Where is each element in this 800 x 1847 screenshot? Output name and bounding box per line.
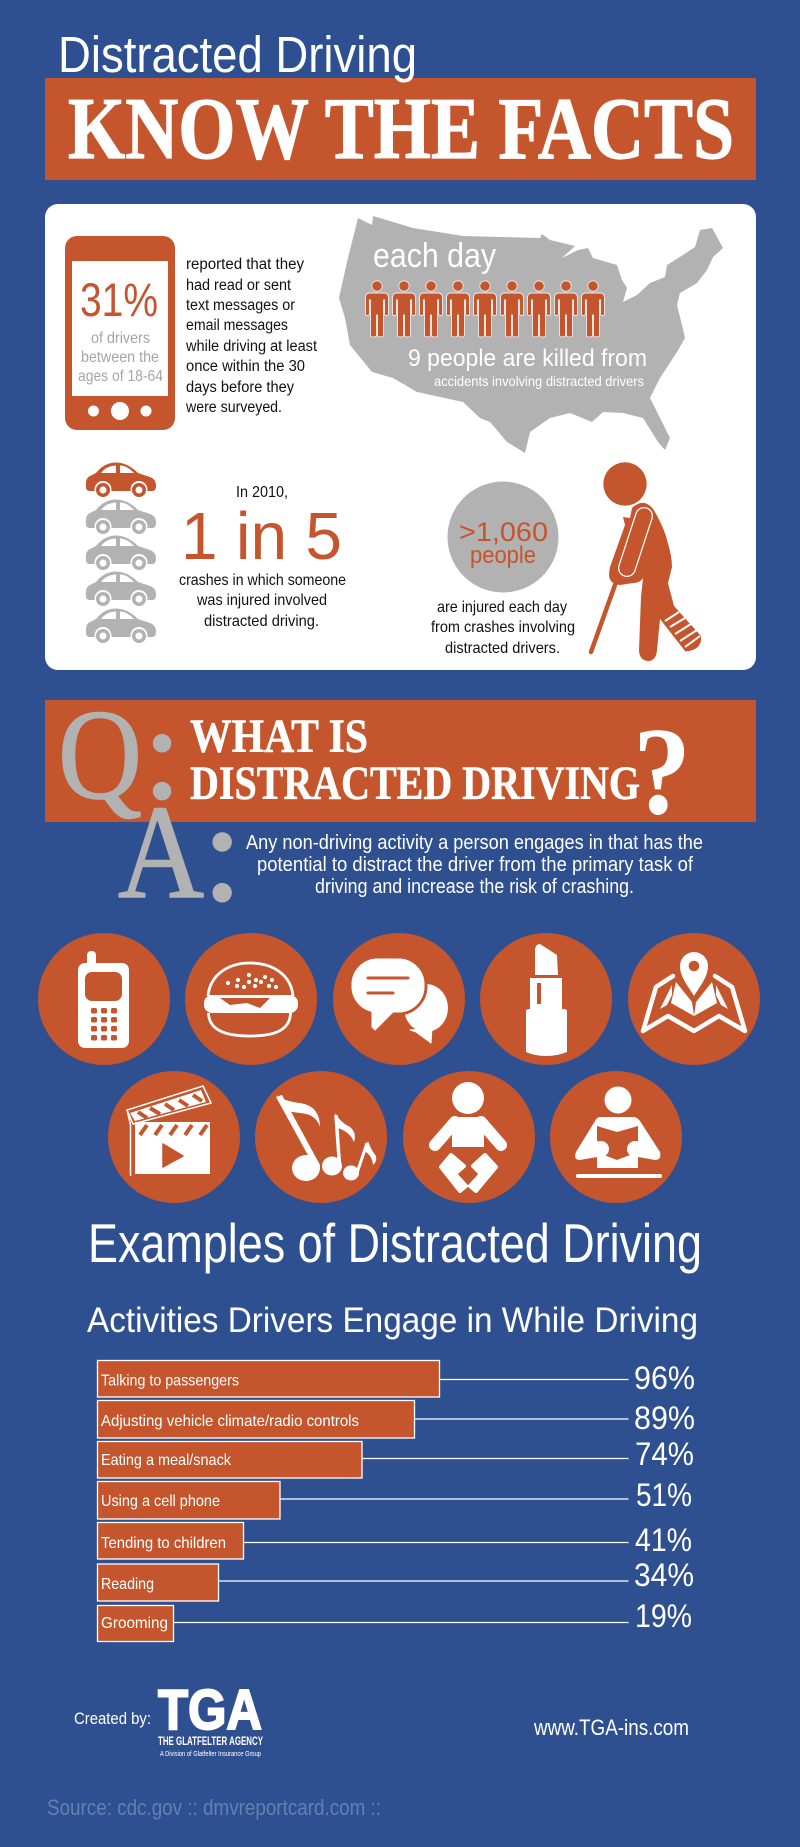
text block: survey description: were surveyed. xyxy=(185,399,282,416)
heading: what is distracted driving: WHAT IS xyxy=(190,710,368,763)
icon: smartphone with 31% stat: 31% xyxy=(80,273,158,326)
text: answer: driving and increase the risk of crashing. xyxy=(315,876,634,898)
bar: adjusting controls 89%: 89% xyxy=(634,1400,695,1436)
bar: reading 34% xyxy=(98,1557,694,1601)
text block: survey description: while driving at least xyxy=(185,338,318,355)
text: In 2010: In 2010, xyxy=(236,484,288,501)
text: crashes description: crashes in which someone xyxy=(179,572,346,589)
bar chart: activities xyxy=(98,1360,695,1642)
colon after A: : xyxy=(203,776,242,930)
text: source: Source: cdc.gov :: dmvreportcard.com :: xyxy=(47,1795,381,1820)
heading: what is distracted driving: ? xyxy=(633,703,691,841)
text: accidents involving distracted drivers: accidents involving distracted drivers xyxy=(434,373,644,389)
bar: cell phone 51%: Using a cell phone xyxy=(101,1493,220,1510)
bar: grooming 19% xyxy=(98,1598,692,1642)
text: 9 people are killed: 9 people are killed from xyxy=(408,345,647,372)
bar: tending to children 41%: Tending to children xyxy=(101,1535,226,1552)
text: injured each day: distracted drivers. xyxy=(445,640,560,657)
bar: tending to children 41%: 41% xyxy=(635,1522,692,1558)
icon: lipstick xyxy=(480,933,612,1065)
icon: movie clapperboard xyxy=(108,1071,240,1203)
logo: TGA: A Division of Glatfelter Insurance Group xyxy=(160,1751,261,1758)
icon: person reading xyxy=(550,1071,682,1203)
stat: over 1,060 people: >1,060 xyxy=(459,517,548,547)
bar: talking to passengers 96%: 96% xyxy=(634,1360,695,1396)
icon: smartphone with 31% stat: ages of 18-64 xyxy=(78,368,163,385)
bar: cell phone 51%: 51% xyxy=(636,1477,692,1513)
map: United States xyxy=(339,216,723,453)
logo: TGA: THE GLATFELTER AGENCY xyxy=(158,1736,263,1748)
text: answer: Any non-driving activity a person engages in that has the xyxy=(246,832,703,854)
bar: tending to children 41% xyxy=(98,1522,692,1559)
bar: eating 74%: 74% xyxy=(635,1436,694,1472)
text: crashes description: distracted driving. xyxy=(204,613,319,630)
text: answer xyxy=(246,832,703,898)
stat: over 1,060 people: people xyxy=(470,542,536,569)
icon: smartphone with 31% stat xyxy=(65,236,175,430)
heading: what is distracted driving: DISTRACTED DRIVING xyxy=(190,757,640,810)
bar: grooming 19%: 19% xyxy=(635,1598,692,1634)
text: injured each day: from crashes involving xyxy=(431,619,575,636)
icon: smartphone with 31% stat: between the xyxy=(81,349,159,366)
bar: reading 34%: 34% xyxy=(634,1557,694,1593)
banner: know the facts xyxy=(45,78,756,180)
colon after Q: : xyxy=(144,681,180,826)
text: crashes description: was injured involved xyxy=(196,592,327,609)
title: Distracted Driving: Distracted Driving xyxy=(58,26,417,83)
text block: survey description: once within the 30 xyxy=(186,358,305,375)
letter: A: A xyxy=(118,778,204,926)
text block: survey description: text messages or xyxy=(186,297,295,314)
text: website: www.TGA-ins.com xyxy=(533,1715,689,1740)
text: injured each day: are injured each day xyxy=(437,599,567,616)
panel: statistics xyxy=(45,204,756,670)
banner: question xyxy=(45,700,756,822)
icon: burger xyxy=(185,933,317,1065)
stat: over 1,060 people xyxy=(448,482,558,592)
text block: survey description: reported that they xyxy=(186,256,304,273)
text: created by: Created by: xyxy=(74,1709,151,1728)
stat: 1 in 5: 1 in 5 xyxy=(181,499,342,574)
icon: injured person with crutch xyxy=(591,462,701,661)
text block: survey description: had read or sent xyxy=(186,277,292,294)
text block: survey description xyxy=(185,256,318,416)
text: injured each day xyxy=(431,599,575,657)
bar: eating 74%: Eating a meal/snack xyxy=(101,1452,232,1469)
text: answer: potential to distract the driver from the primary task of xyxy=(257,854,693,876)
bar: grooming 19%: Grooming xyxy=(101,1615,168,1632)
icon: cell phone xyxy=(38,933,170,1065)
icon: smartphone with 31% stat: of drivers xyxy=(91,330,150,347)
letter: Q: Q xyxy=(58,684,142,826)
bar: cell phone 51% xyxy=(98,1477,692,1519)
icon: baby xyxy=(403,1071,535,1203)
bar: reading 34%: Reading xyxy=(101,1576,154,1593)
bar: talking to passengers 96% xyxy=(98,1360,695,1397)
heading: each day: each day xyxy=(373,237,496,275)
heading: activities drivers engage in: Activities Drivers Engage in While Driving xyxy=(87,1301,698,1340)
icon: five cars xyxy=(86,462,156,644)
logo: TGA: TGA xyxy=(158,1678,262,1742)
text block: survey description: email messages xyxy=(186,317,288,334)
icon: music notes xyxy=(255,1071,387,1203)
icon: map with pin xyxy=(628,933,760,1065)
text block: survey description: days before they xyxy=(186,379,294,396)
bar: talking to passengers 96%: Talking to passengers xyxy=(101,1372,239,1390)
icon: chat bubbles xyxy=(333,933,465,1065)
pictogram: nine people xyxy=(366,281,604,337)
heading: what is distracted driving xyxy=(190,703,691,841)
text: crashes description xyxy=(179,572,346,630)
bar: adjusting controls 89% xyxy=(98,1400,695,1438)
bar: adjusting controls 89%: Adjusting vehicle climate/radio controls xyxy=(101,1413,359,1430)
bar: eating 74% xyxy=(98,1436,694,1478)
